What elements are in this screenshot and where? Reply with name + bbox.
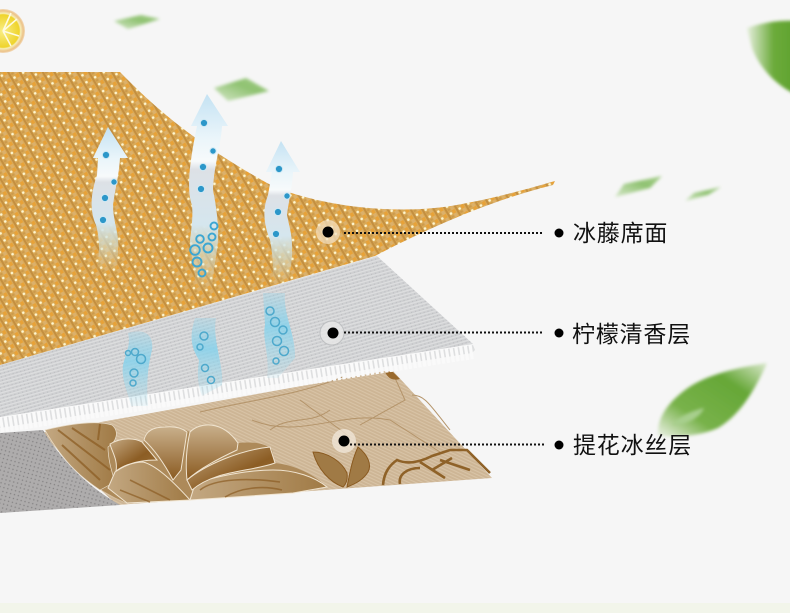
- blue vapour stream three: [263, 293, 295, 378]
- peony petal d: [187, 447, 275, 490]
- gray top surface: [0, 256, 473, 417]
- peony lower left petal: [108, 462, 190, 503]
- left flower leaf: [45, 423, 116, 490]
- peony petal a: [110, 439, 157, 471]
- floral sprig at right: [383, 450, 490, 485]
- callout: jacquard ice silk layer: [332, 429, 692, 458]
- callout: lemon fragrance layer: 柠檬清香层: [572, 321, 691, 347]
- leaf sprig: [313, 447, 370, 487]
- bubbles: [126, 307, 288, 386]
- blue vapour stream one: [123, 331, 152, 406]
- arrow: right vapour arrow: [264, 141, 300, 285]
- white serrated teeth: [0, 351, 473, 425]
- icon: leaf right small two: [685, 187, 721, 201]
- peony petal b: [144, 427, 187, 480]
- icon: big leaf top right: [747, 21, 790, 94]
- beige fabric: [40, 371, 492, 505]
- callout: ice rattan surface: 冰藤席面: [573, 220, 668, 246]
- callout: ice rattan surface: [316, 220, 668, 246]
- icon: small leaf top: [114, 15, 160, 29]
- faint vine lines: [200, 376, 450, 452]
- panel: gray mesh fabric: [0, 430, 120, 513]
- icon: leaf near arrows: [214, 78, 269, 101]
- blue vapour stream two: [192, 318, 222, 396]
- peony petal c: [186, 425, 238, 480]
- serrated edge base: [0, 345, 475, 428]
- icon: leaf right small one: [615, 176, 662, 197]
- icon: lemon slice: [0, 9, 25, 53]
- left leaf veins: [58, 424, 110, 480]
- panel: ice rattan mat surface: [0, 72, 555, 365]
- arrow: centre vapour arrow: [189, 94, 228, 292]
- callout: lemon fragrance layer: [320, 321, 691, 347]
- bottom strip: [0, 603, 790, 613]
- peony inner lines: [120, 480, 282, 502]
- icon: big leaf lower right: [658, 363, 767, 437]
- panel: jacquard ice silk layer: [40, 371, 492, 505]
- arrow: left vapour arrow: [92, 127, 128, 272]
- callout: jacquard ice silk layer: 提花冰丝层: [573, 432, 692, 458]
- peony lower right petal: [190, 470, 327, 500]
- top corner motif: [385, 372, 400, 380]
- flower silhouette: [45, 423, 327, 503]
- panel: lemon fresh layer: [0, 256, 475, 428]
